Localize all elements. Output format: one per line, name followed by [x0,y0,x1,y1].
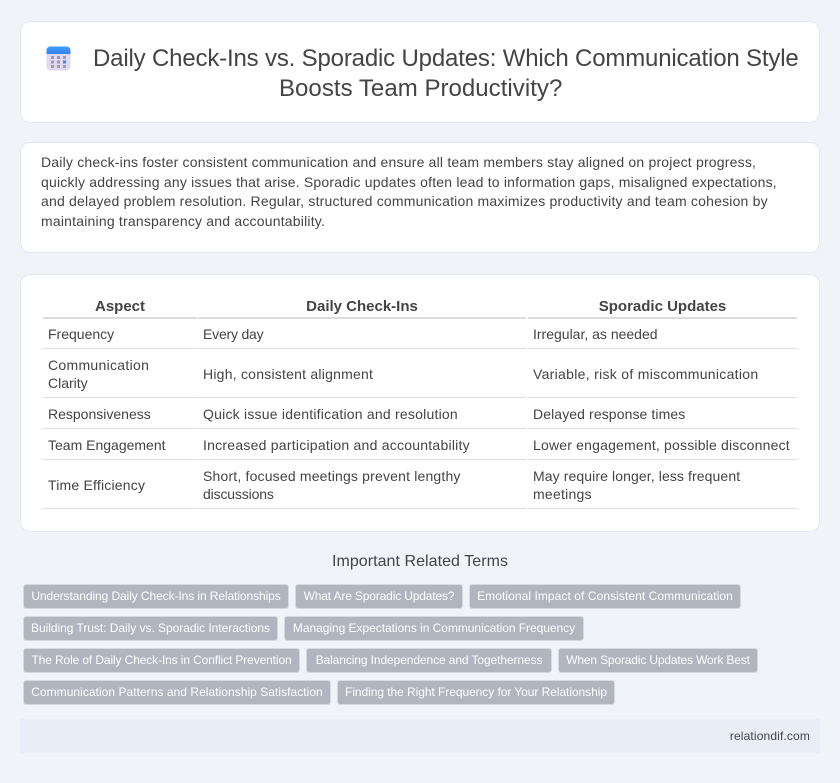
related term tags: The Role of Daily Check-Ins in Conflict Prevention [31,653,292,667]
related term tags: Balancing Independence and Togetherness [316,653,542,667]
row: Time Efficiency: meetings [533,486,592,502]
row: Team Engagement: Team Engagement [48,437,166,453]
row: Team Engagement: Lower engagement, possible disconnect [533,437,790,453]
title: Daily Check-Ins vs. Sporadic Updates: Which Communication Style [93,45,799,72]
footer bar [20,719,820,753]
row: Responsiveness: Delayed response times [533,406,685,422]
related term tags: What Are Sporadic Updates? [304,589,454,603]
related term tags: Finding the Right Frequency for Your Relationship [345,685,607,699]
row: Responsiveness [48,406,685,422]
intro text: and delayed problem resolution. Regular, structured communication maximizes productivity and team cohesion by [41,193,768,209]
intro text: maintaining transparency and accountability. [41,213,325,229]
row: Frequency [48,326,658,342]
row: Time Efficiency: discussions [203,486,274,502]
header panel [20,21,820,123]
row: Communication Clarity: Communication [48,357,149,373]
row: Responsiveness: Responsiveness [48,406,151,422]
related term tags: Managing Expectations in Communication Frequency [293,621,575,635]
related term tags: Communication Patterns and Relationship Satisfaction [31,685,323,699]
row: Time Efficiency: Time Efficiency [48,477,145,493]
row: Time Efficiency [48,468,740,502]
related term tags: When Sporadic Updates Work Best [566,653,750,667]
row: Team Engagement [48,437,790,453]
row: Time Efficiency: May require longer, less frequent [533,468,740,484]
title: Boosts Team Productivity? [279,75,562,102]
related term tags [23,584,758,705]
table header: Sporadic Updates: Sporadic Updates [599,298,726,315]
related terms heading: Important Related Terms [332,553,508,570]
row: Communication Clarity: High, consistent alignment [203,366,373,382]
row: Time Efficiency: Short, focused meetings prevent lengthy [203,468,461,484]
intro text: quickly addressing any issues that arise. Sporadic updates often lead to information gaps, misaligned expectations, [41,174,777,190]
row: Communication Clarity [48,357,758,391]
related term tags: Building Trust: Daily vs. Sporadic Interactions [31,621,270,635]
footer source text: relationdif.com [730,729,810,743]
row: Communication Clarity: Clarity [48,375,88,391]
row: Frequency: Every day [203,326,263,342]
related term tags: Emotional Impact of Consistent Communication [477,589,733,603]
row: Communication Clarity: Variable, risk of miscommunication [533,366,758,382]
intro panel [20,142,820,253]
comparison table panel [20,274,820,532]
related term tags: Understanding Daily Check-Ins in Relationships [31,589,281,603]
row: Team Engagement: Increased participation and accountability [203,437,470,453]
row: Frequency: Frequency [48,326,114,342]
table rules [43,317,797,509]
intro text [41,154,777,229]
intro text: Daily check-ins foster consistent communication and ensure all team members stay aligned on project progress, [41,154,756,170]
table header: Daily Check-Ins: Daily Check-Ins [306,298,418,315]
icon: calendar [46,46,70,70]
row: Responsiveness: Quick issue identification and resolution [203,406,458,422]
title [93,45,799,102]
table header: Aspect: Aspect [95,298,145,315]
row: Frequency: Irregular, as needed [533,326,658,342]
